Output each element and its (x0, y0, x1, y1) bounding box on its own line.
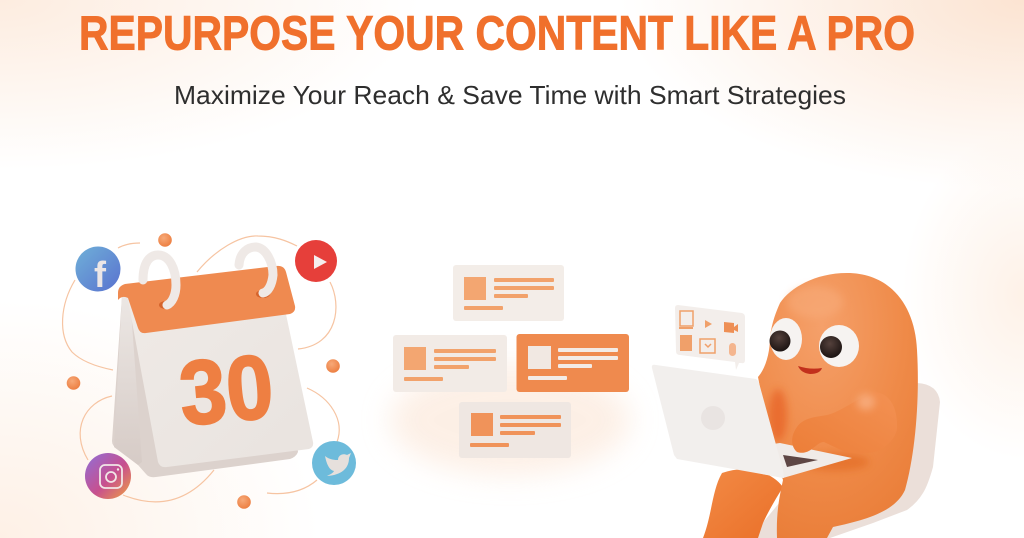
shading beside laptop (769, 389, 787, 441)
illustration: calendar with social icons (63, 233, 356, 509)
character mouth (798, 366, 822, 374)
orange dots (67, 233, 340, 509)
character legs (703, 469, 783, 538)
card: left (393, 335, 507, 392)
illustration: orange character with laptop (652, 273, 940, 538)
laptop base (677, 443, 852, 478)
ring holes (159, 290, 270, 309)
card: highlighted orange (516, 334, 629, 392)
back pages (112, 296, 298, 477)
number 30: 30 (175, 335, 277, 445)
icon: facebook: f (94, 254, 107, 295)
illustration: content cards (390, 265, 630, 475)
front page (128, 300, 313, 467)
character body (758, 273, 918, 538)
character head highlight (787, 286, 843, 318)
header (118, 266, 295, 333)
icon: facebook (76, 246, 120, 295)
binding rings (143, 247, 273, 305)
icon: youtube (295, 240, 337, 282)
connecting curves (63, 236, 339, 502)
shading under arm (801, 453, 869, 471)
soft shadow (390, 365, 630, 475)
card: bottom (459, 402, 571, 458)
chair (750, 383, 940, 538)
character arm (792, 392, 897, 453)
calendar (112, 247, 313, 477)
laptop lid (652, 365, 784, 478)
character eyes (770, 318, 859, 367)
icon: twitter (312, 441, 356, 485)
speech bubble with media icons (675, 305, 745, 370)
card: top (453, 265, 564, 321)
subtitle: Maximize Your Reach & Save Time with Smart Strategies (174, 80, 846, 110)
icon: instagram (85, 453, 131, 499)
